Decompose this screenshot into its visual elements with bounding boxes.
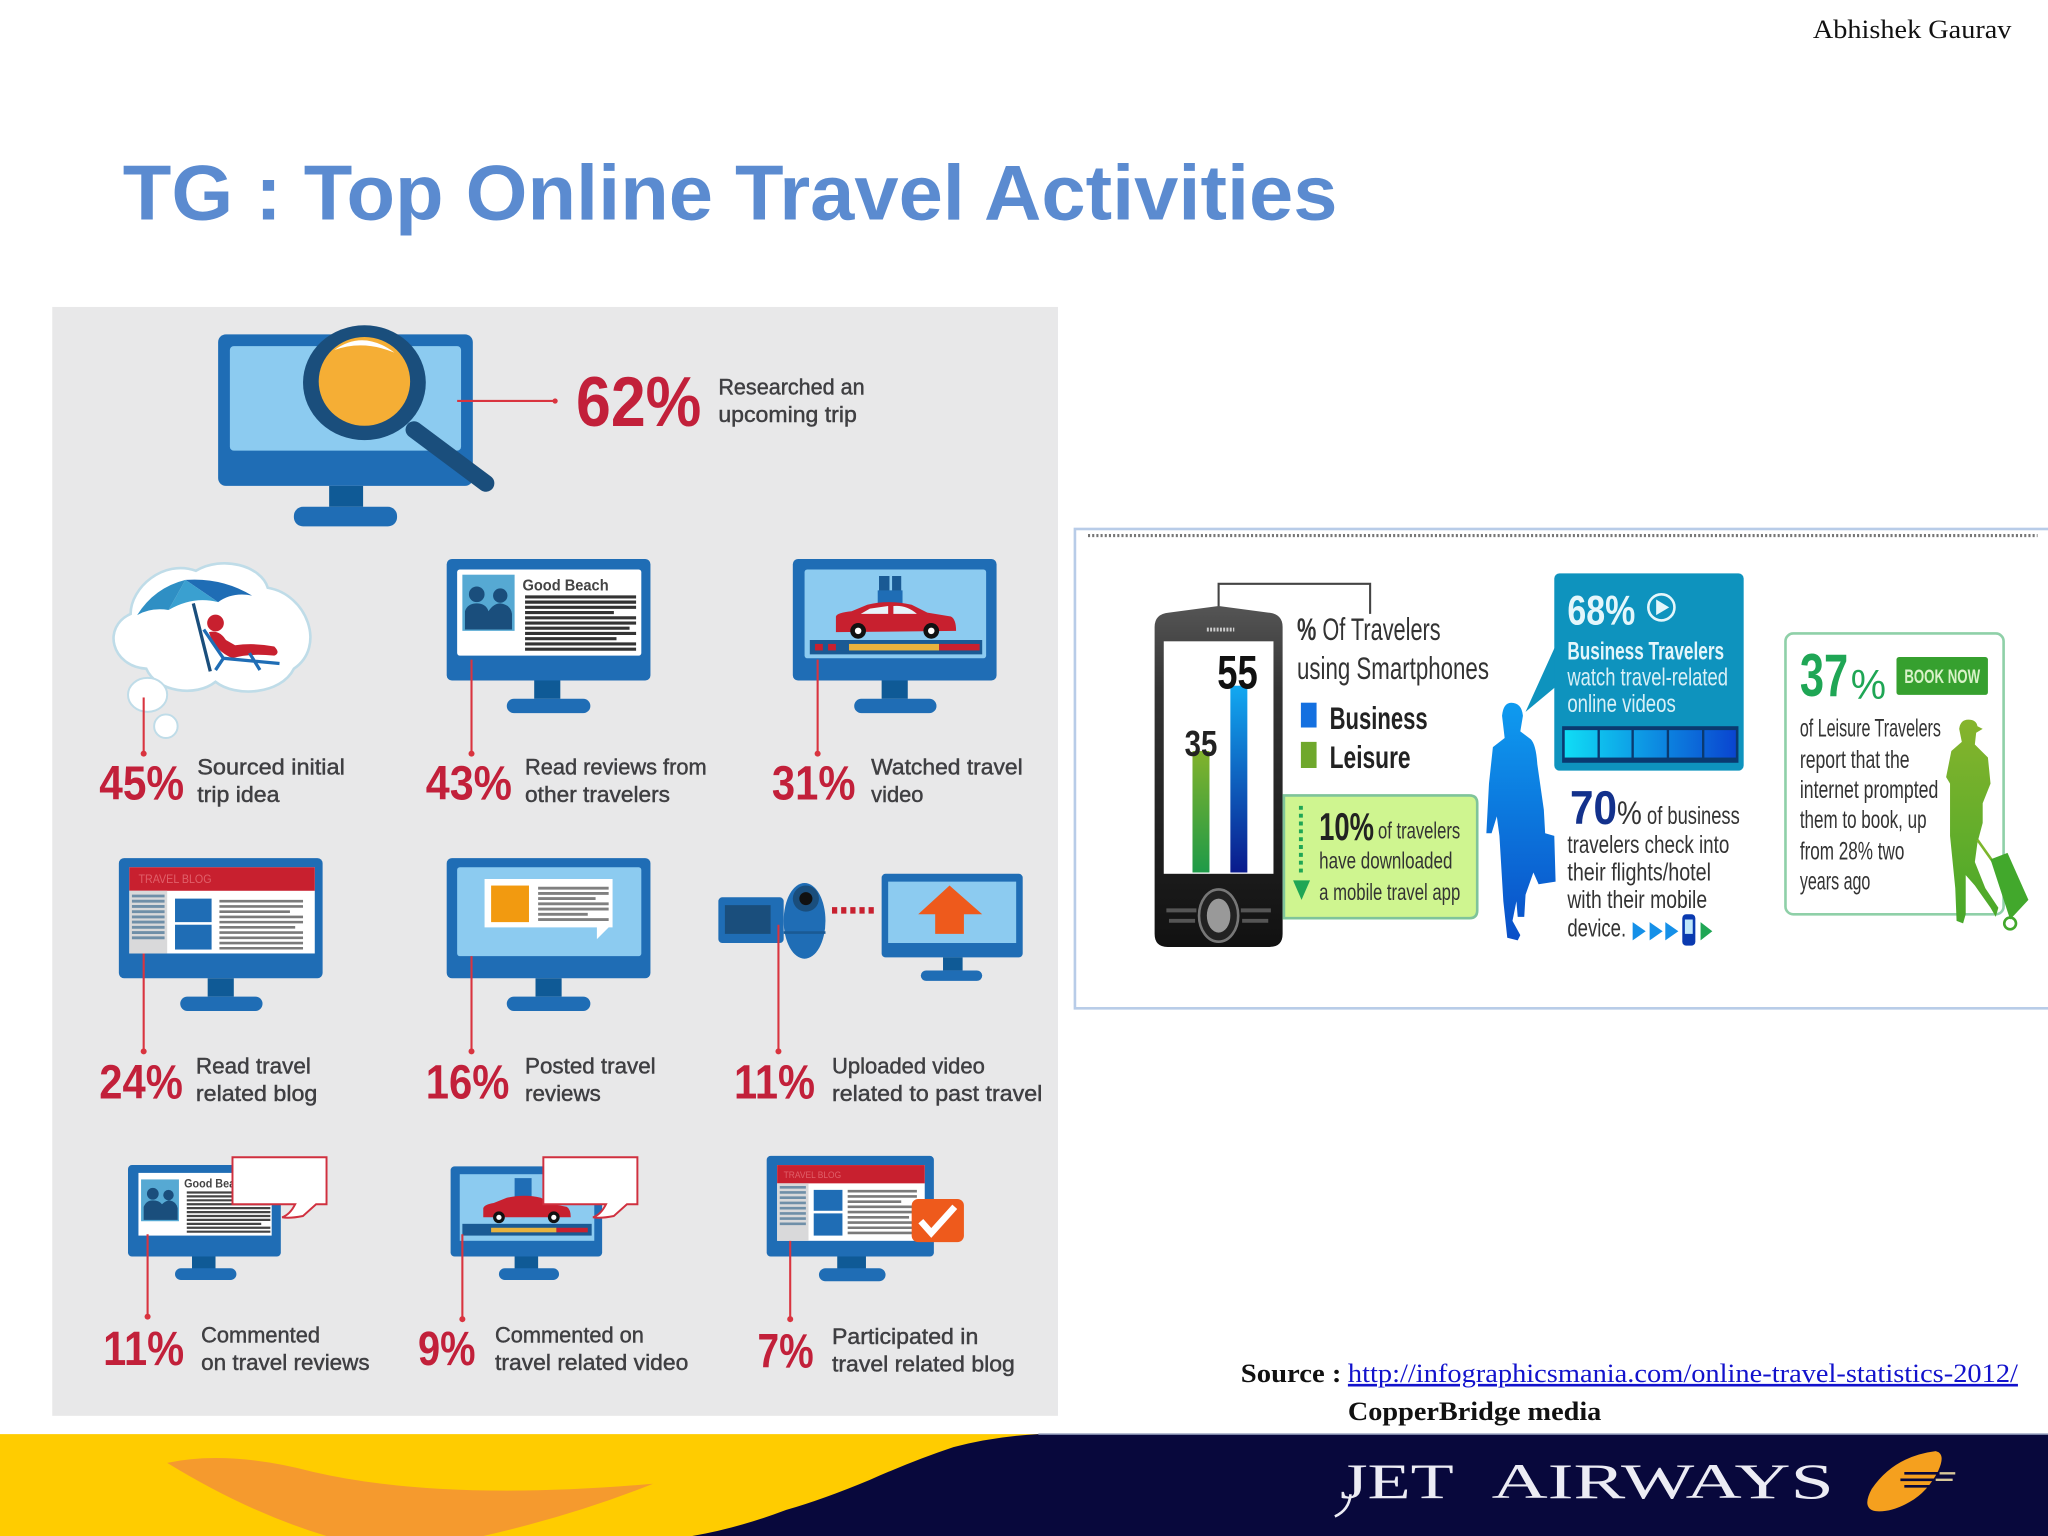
- connector: [775, 925, 781, 1054]
- connector: [459, 1234, 465, 1322]
- icon: monitor with blog and check mark: TRAVEL BLOG: [784, 1170, 841, 1180]
- text: 70% of business travelers: with their mobile: [1567, 887, 1707, 914]
- label: participated: Participated in: [832, 1324, 978, 1349]
- panel: smartphone travelers: [1075, 529, 2048, 1008]
- icon: monitor with review page: Good Beach: [522, 577, 609, 594]
- text: 70% of business travelers: %: [1617, 794, 1642, 831]
- callout: 10% of travelers: a mobile travel app: [1319, 879, 1460, 905]
- stat: 16%: 16%: [426, 1055, 509, 1109]
- label: read blog: related blog: [196, 1081, 317, 1106]
- stat: 43%: 43%: [426, 756, 512, 810]
- source citation: Source :: [1241, 1359, 1341, 1388]
- label: uploaded: [832, 1054, 1042, 1106]
- text: 70% of business travelers: of business: [1647, 803, 1740, 830]
- connector: [141, 697, 147, 757]
- connector: [815, 660, 821, 757]
- stat: 31%: 31%: [772, 756, 856, 810]
- icon: business traveler silhouette: [1486, 703, 1556, 940]
- icon: monitor with comment on review: [128, 1157, 327, 1280]
- panel: online travel activities: [52, 307, 1058, 1416]
- title: TG : Top Online Travel Activities: [123, 148, 1337, 236]
- connector: [469, 660, 475, 757]
- callout: 37% leisure travelers: BOOK NOW: [1904, 666, 1980, 688]
- text: 70% of business travelers: device.: [1567, 915, 1626, 942]
- icon: smartphone bar chart: 35: [1185, 723, 1217, 764]
- connector: [141, 953, 147, 1054]
- icon: smartphone bar chart: [1155, 584, 1370, 947]
- stat: 62%: 62%: [576, 362, 701, 441]
- stat: 11% uploaded: 11%: [734, 1055, 815, 1109]
- icon: monitor with travel video: [793, 559, 997, 713]
- text: 70% of business travelers: 70: [1570, 781, 1617, 834]
- label: sourced: Sourced initial: [197, 755, 345, 780]
- icon: camera uploading to monitor: [718, 874, 1023, 981]
- brand: Jet Airways: [1335, 1454, 1834, 1516]
- footer banner: [0, 1434, 2048, 1536]
- text: 70% of business travelers: their flights/hotel: [1567, 859, 1711, 886]
- legend: [1301, 701, 1428, 775]
- label: read reviews: other travelers: [525, 782, 670, 807]
- connector: [457, 398, 558, 404]
- label: participated: [832, 1324, 1015, 1376]
- source citation: CopperBridge media: [1348, 1397, 1601, 1426]
- connector: [145, 1234, 151, 1320]
- label: uploaded: Uploaded video: [832, 1054, 985, 1079]
- label: researched: [718, 374, 865, 427]
- label: uploaded: related to past travel: [832, 1081, 1042, 1106]
- callout: 10% of travelers: have downloaded: [1319, 848, 1452, 874]
- icon: monitor with magnifier: [218, 325, 486, 526]
- stat: 9%: 9%: [418, 1322, 475, 1376]
- footer swoosh: [167, 1458, 653, 1536]
- callout: 37% leisure travelers: %: [1851, 661, 1886, 708]
- callout: 37% leisure travelers: from 28% two: [1800, 838, 1904, 865]
- label: commented video: travel related video: [495, 1350, 688, 1375]
- label: watched: video: [871, 782, 923, 807]
- callout: 10% of travelers: of travelers: [1378, 818, 1460, 844]
- callout: 10% of travelers: [1284, 795, 1477, 918]
- icon: monitor with travel blog: TRAVEL BLOG: [138, 873, 212, 886]
- label: watched: [871, 755, 1023, 807]
- author name: Abhishek Gaurav: [1813, 14, 2012, 44]
- callout: 68% business travelers: watch travel-related: [1567, 665, 1728, 692]
- brand: Jet Airways: AIRWAYS: [1492, 1454, 1834, 1509]
- label: researched: upcoming trip: [718, 402, 857, 427]
- label: read blog: [196, 1054, 317, 1106]
- label: researched: Researched an: [718, 374, 865, 399]
- label: read reviews: [525, 755, 707, 807]
- label: posted: reviews: [525, 1081, 601, 1106]
- label: commented video: [495, 1323, 688, 1375]
- label: watched: Watched travel: [871, 755, 1023, 780]
- logo: Jet Airways sun: [1867, 1451, 1955, 1511]
- callout: 37% leisure travelers: years ago: [1800, 868, 1870, 895]
- icon: monitor with comment on review: Good Bea: [184, 1177, 236, 1190]
- callout: 10% of travelers: 10%: [1319, 806, 1374, 849]
- label: posted: Posted travel: [525, 1054, 656, 1079]
- label: posted: [525, 1054, 656, 1106]
- icon: monitor with travel blog: [119, 858, 323, 1011]
- callout: 37% leisure travelers: report that the: [1800, 747, 1910, 774]
- callout: 68% business travelers: [1526, 573, 1744, 771]
- label: read reviews: Read reviews from: [525, 755, 707, 780]
- callout: 37% leisure travelers: [1785, 633, 2004, 914]
- label: commented reviews: [201, 1323, 370, 1375]
- legend: Business: [1330, 701, 1428, 736]
- heading: percent of travelers: [1297, 612, 1489, 686]
- callout: 37% leisure travelers: them to book, up: [1800, 807, 1927, 834]
- connector: [469, 956, 475, 1054]
- icon: monitor with review page: [447, 559, 650, 713]
- label: read blog: Read travel: [196, 1054, 311, 1079]
- heading: percent of travelers: using Smartphones: [1297, 651, 1489, 686]
- icon: arrows to phone: [1633, 914, 1712, 946]
- label: participated: travel related blog: [832, 1351, 1015, 1376]
- callout: 37% leisure travelers: of Leisure Travelers: [1800, 716, 1941, 743]
- label: sourced: trip idea: [197, 782, 280, 807]
- icon: thought cloud with beach chair: [114, 563, 310, 738]
- callout: 37% leisure travelers: 37: [1800, 642, 1848, 709]
- label: commented video: Commented on: [495, 1323, 644, 1348]
- label: sourced: [197, 755, 345, 807]
- icon: monitor with blog and check mark: [767, 1156, 964, 1281]
- callout: 68% business travelers: online videos: [1567, 691, 1676, 718]
- heading: percent of travelers: % Of Travelers: [1297, 612, 1441, 647]
- callout: 68% business travelers: 68%: [1567, 586, 1635, 633]
- text: 70% of business travelers: travelers check into: [1567, 832, 1729, 859]
- source citation: [1241, 1359, 2019, 1426]
- connector: [787, 1241, 793, 1322]
- source citation: http://infographicsmania.com/online-travel-statistics-2012/: [1348, 1359, 2019, 1388]
- stat: 45%: 45%: [99, 756, 184, 810]
- callout: 37% leisure travelers: internet prompted: [1800, 777, 1938, 804]
- stat: 11% commented: 11%: [103, 1322, 184, 1376]
- brand: Jet Airways: JET: [1340, 1454, 1454, 1509]
- legend: Leisure: [1330, 740, 1411, 775]
- icon: leisure traveler with suitcase: [1946, 720, 2028, 929]
- icon: monitor with comment on video: [451, 1157, 637, 1280]
- stat: 24%: 24%: [99, 1055, 183, 1109]
- label: commented reviews: Commented: [201, 1323, 320, 1348]
- callout: 68% business travelers: Business Travelers: [1567, 639, 1724, 666]
- icon: smartphone bar chart: 55: [1217, 645, 1258, 698]
- text: 70% of business travelers: [1567, 781, 1740, 942]
- label: commented reviews: on travel reviews: [201, 1350, 370, 1375]
- stat: 7%: 7%: [758, 1325, 814, 1379]
- icon: monitor with posted review: [447, 858, 650, 1011]
